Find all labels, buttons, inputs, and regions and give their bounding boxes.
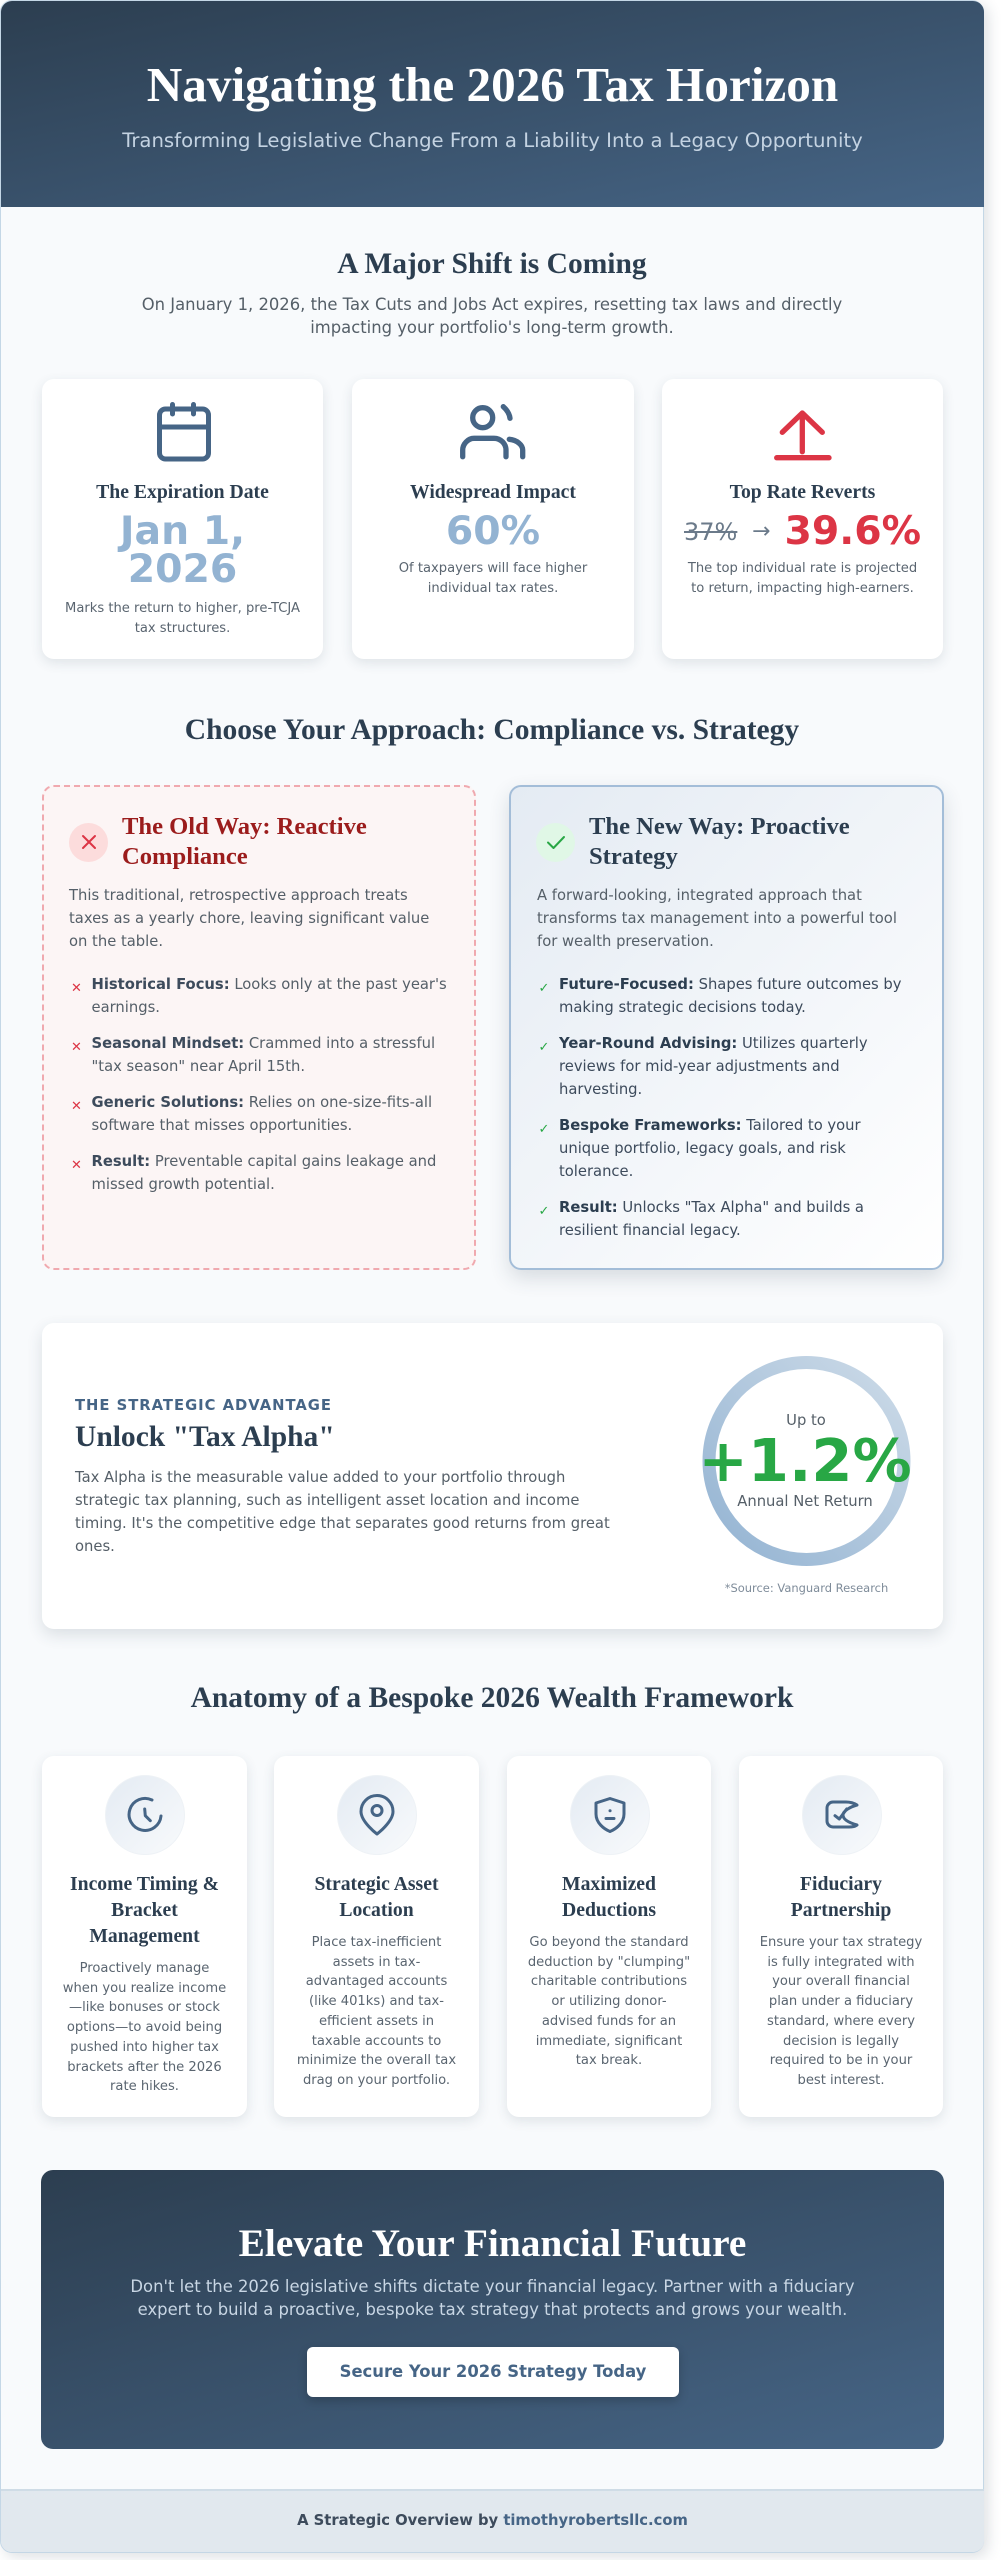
icon: users: [460, 404, 526, 460]
description: taxable accounts to: [312, 2034, 441, 2049]
description: Ensure your tax strategy: [760, 1935, 922, 1950]
description: The top individual rate is projected: [688, 561, 917, 576]
title: Navigating the 2026 Tax Horizon: [147, 57, 838, 112]
heading: The Expiration Date: [96, 481, 269, 503]
icon: check in circle: [536, 822, 575, 862]
item 3: Bespoke Frameworks: Tailored to your: [559, 1116, 861, 1134]
subtitle: Transforming Legislative Change From a Liability Into a Legacy Opportunity: [122, 129, 863, 152]
description: timing. It's the competitive edge that separates good returns from great: [75, 1515, 610, 1532]
item 4: ✕: [71, 1158, 82, 1172]
description: transforms tax management into a powerful tool: [537, 910, 897, 926]
description: advantaged accounts: [306, 1974, 447, 1989]
chart: return ring: [698, 1356, 912, 1566]
description: strategic tax planning, such as intelligent asset location and income: [75, 1492, 579, 1509]
description: required to be in your: [770, 2053, 912, 2068]
description: Of taxpayers will face higher: [399, 561, 587, 576]
description: [130, 2277, 855, 2319]
heading: Strategic Asset: [314, 1873, 438, 1895]
description: A forward-looking, integrated approach that: [537, 886, 862, 904]
description: plan under a fiduciary: [769, 1994, 913, 2009]
item 1: [71, 976, 447, 1016]
description: [65, 601, 300, 636]
framework card: fiduciary: [739, 1756, 943, 2117]
icon: partnership check: [802, 1775, 882, 1855]
item 2: [71, 1034, 435, 1074]
framework card: income timing: [42, 1756, 247, 2117]
item 3: ✕: [71, 1098, 82, 1114]
description: assets in tax-: [333, 1955, 420, 1970]
item 3: tolerance.: [559, 1162, 633, 1180]
item 3: software that misses opportunities.: [92, 1116, 352, 1134]
heading: Partnership: [791, 1899, 891, 1921]
source note: *Source: Vanguard Research: [725, 1581, 888, 1595]
description: [688, 561, 917, 596]
section heading: a major shift: A Major Shift is Coming: [337, 248, 647, 280]
description: (like 401ks) and tax-: [309, 1994, 444, 2009]
button: [307, 2347, 679, 2397]
description: [68, 886, 429, 950]
description: on the table.: [69, 932, 163, 950]
description: Don't let the 2026 legislative shifts dictate your financial legacy. Partner with a fiduciary: [130, 2277, 855, 2296]
heading: Fiduciary: [800, 1873, 882, 1895]
description: tax break.: [576, 2053, 642, 2068]
heading: Location: [339, 1899, 414, 1921]
item 2: Seasonal Mindset: Crammed into a stressful: [92, 1034, 435, 1052]
stat value: 2026: [128, 546, 237, 592]
item 4: Result: Preventable capital gains leakage and: [92, 1152, 436, 1170]
heading: [791, 1873, 891, 1921]
heading: Widespread Impact: [410, 481, 576, 503]
stat value: [118, 508, 245, 592]
description: brackets after the 2026: [67, 2060, 222, 2075]
heading: Elevate Your Financial Future: [239, 2221, 746, 2265]
description: [297, 1935, 456, 2088]
description: ones.: [75, 1538, 115, 1555]
section heading: anatomy: Anatomy of a Bespoke 2026 Wealth Framework: [191, 1682, 793, 1714]
description: pushed into higher tax: [70, 2040, 219, 2055]
item 3: unique portfolio, legacy goals, and risk: [559, 1140, 846, 1156]
item 2: [538, 1034, 868, 1098]
list of drawbacks: [71, 976, 447, 1192]
item 4: ✓: [538, 1204, 549, 1218]
description: [63, 1961, 226, 2094]
description: taxes as a yearly chore, leaving significant value: [69, 910, 429, 926]
item 2: reviews for mid-year adjustments and: [559, 1058, 840, 1074]
description: tax structures.: [135, 621, 230, 636]
heading: Deductions: [562, 1899, 656, 1921]
description: standard, where every: [767, 2014, 915, 2029]
new rate: 39.6%: [784, 508, 921, 554]
value: +1.2%: [698, 1426, 912, 1495]
heading: Maximized: [562, 1873, 656, 1895]
item 2: "tax season" near April 15th.: [92, 1058, 305, 1074]
item 1: ✓: [538, 980, 549, 996]
description: to return, impacting high-earners.: [691, 581, 914, 596]
framework card: deductions: [507, 1756, 711, 2117]
item 1: Historical Focus: Looks only at the past year's: [92, 976, 447, 992]
description: decision is legally: [783, 2034, 899, 2049]
description: Place tax-inefficient: [312, 1935, 441, 1950]
eyebrow: THE STRATEGIC ADVANTAGE: [75, 1397, 332, 1414]
item 2: harvesting.: [559, 1080, 642, 1098]
heading: Unlock "Tax Alpha": [75, 1421, 335, 1453]
description: options—to avoid being: [67, 2020, 222, 2035]
heading: Bracket: [111, 1899, 178, 1921]
description: Go beyond the standard: [529, 1935, 689, 1950]
item 3: Generic Solutions: Relies on one-size-fits-all: [92, 1094, 432, 1110]
item 3: [538, 1116, 861, 1180]
item 4: Result: Unlocks "Tax Alpha" and builds a: [559, 1198, 864, 1216]
description: This traditional, retrospective approach treats: [69, 886, 408, 904]
item 4: missed growth potential.: [92, 1176, 275, 1192]
description: [74, 1469, 610, 1555]
panel: new way: [509, 785, 944, 1270]
item 4: resilient financial legacy.: [559, 1222, 741, 1238]
item 1: ✕: [71, 980, 82, 996]
heading: The Old Way: Reactive: [122, 813, 367, 840]
old rate: 37%: [684, 518, 737, 546]
description: advised funds for an: [542, 2014, 676, 2029]
icon: clock: [105, 1775, 185, 1855]
item 1: earnings.: [92, 998, 160, 1016]
heading: The New Way: Proactive: [589, 813, 850, 840]
description: Tax Alpha is the measurable value added to your portfolio through: [75, 1469, 565, 1486]
footer text: A Strategic Overview by timothyrobertsllc.com: [297, 2512, 688, 2529]
description: deduction by "clumping": [528, 1955, 690, 1970]
description: —like bonuses or stock: [69, 2000, 220, 2015]
icon: map pin: [337, 1775, 417, 1855]
description: Marks the return to higher, pre-TCJA: [65, 601, 300, 616]
item 1: making strategic decisions today.: [559, 998, 806, 1016]
footer: [1, 2489, 984, 2552]
header: [1, 1, 984, 207]
icon: x in circle: [69, 822, 108, 862]
framework card: asset location: [274, 1756, 479, 2117]
item 2: Year-Round Advising: Utilizes quarterly: [559, 1034, 868, 1052]
item 3: [71, 1094, 432, 1134]
stat card: widespread impact: [352, 379, 634, 659]
description: minimize the overall tax: [297, 2053, 456, 2068]
description: is fully integrated with: [767, 1955, 915, 1970]
panel: old way: [42, 785, 476, 1270]
heading: [589, 813, 850, 870]
heading: [314, 1873, 438, 1921]
description: best interest.: [798, 2073, 884, 2088]
description: individual tax rates.: [428, 581, 558, 596]
stat card: expiration date: [42, 379, 323, 659]
call to action panel: [41, 2170, 944, 2449]
label top: Up to: [786, 1412, 826, 1429]
section heading: approach: Choose Your Approach: Compliance vs. Strategy: [185, 714, 799, 746]
description: your overall financial: [772, 1974, 910, 1989]
stat value: 60%: [446, 508, 540, 554]
icon: upload arrow: [774, 410, 832, 460]
item 2: ✕: [71, 1040, 82, 1054]
list of benefits: [538, 976, 902, 1238]
heading: Compliance: [122, 843, 248, 870]
heading: Income Timing &: [70, 1873, 219, 1895]
button: Secure Your 2026 Strategy Today: [340, 2362, 646, 2381]
description: Proactively manage: [80, 1961, 209, 1976]
stat card: top rate reverts: [662, 379, 943, 659]
ring: [702, 1356, 910, 1566]
description: for wealth preservation.: [537, 932, 714, 950]
icon: shield: [570, 1775, 650, 1855]
intro text: impacting your portfolio's long-term growth.: [310, 318, 674, 337]
description: efficient assets in: [319, 2014, 434, 2029]
icon: calendar: [157, 402, 211, 462]
item 1: [538, 976, 902, 1016]
description: when you realize income: [63, 1981, 226, 1996]
heading: Strategy: [589, 843, 678, 870]
description: or utilizing donor-: [551, 1994, 667, 2009]
label bottom: Annual Net Return: [737, 1493, 873, 1510]
intro text: [142, 295, 842, 337]
description: [528, 1935, 690, 2068]
item 2: ✓: [538, 1040, 549, 1054]
description: immediate, significant: [536, 2034, 682, 2049]
description: [399, 561, 588, 596]
arrow: →: [752, 519, 770, 544]
panel: tax alpha: [42, 1323, 943, 1629]
item 4: [71, 1152, 436, 1192]
description: charitable contributions: [531, 1974, 687, 1989]
intro text: On January 1, 2026, the Tax Cuts and Jobs Act expires, resetting tax laws and directly: [142, 295, 842, 314]
heading: [562, 1873, 656, 1921]
heading: Top Rate Reverts: [730, 481, 875, 503]
stat value: Jan 1,: [120, 508, 245, 554]
heading: Management: [89, 1925, 200, 1947]
item 4: [538, 1198, 864, 1238]
description: drag on your portfolio.: [303, 2073, 450, 2088]
heading: [70, 1873, 219, 1947]
item 3: ✓: [538, 1122, 549, 1136]
description: expert to build a proactive, bespoke tax strategy that protects and grows your wealth.: [138, 2300, 847, 2319]
description: [760, 1935, 922, 2088]
description: [537, 886, 897, 950]
item 1: Future-Focused: Shapes future outcomes by: [559, 976, 902, 992]
description: rate hikes.: [110, 2079, 179, 2094]
heading: [122, 813, 367, 870]
